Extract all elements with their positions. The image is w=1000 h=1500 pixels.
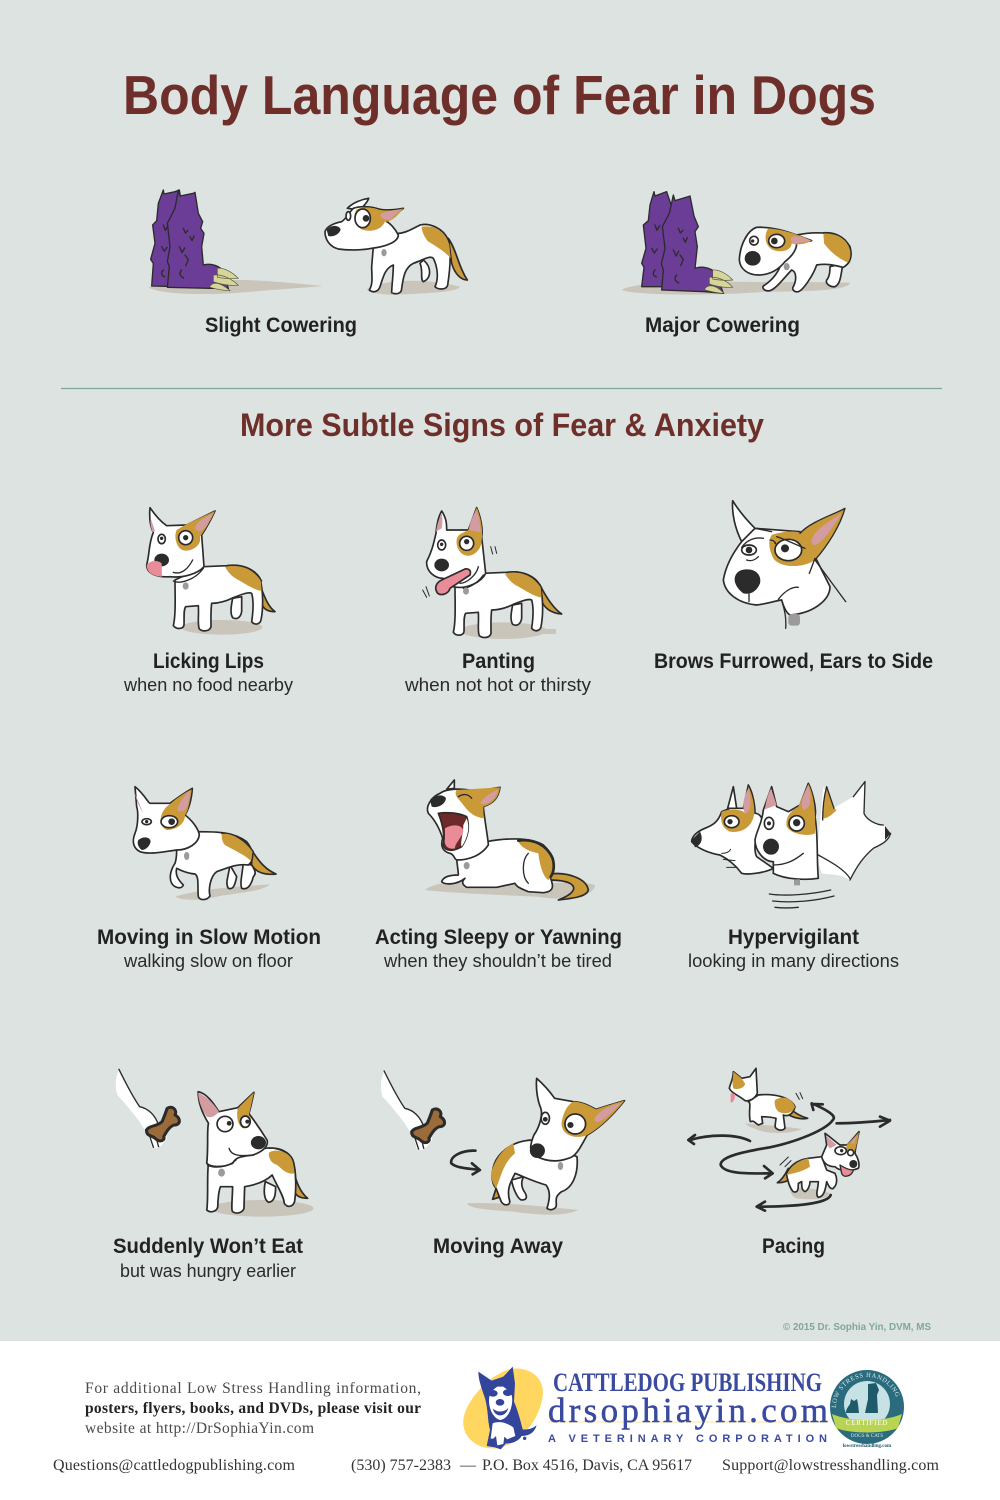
illustration: two pacing dogs with arrows xyxy=(688,1068,890,1211)
logo: Cattledog Publishing: drsophiayin.com xyxy=(548,1391,828,1430)
illustration: dog looking in many directions xyxy=(692,782,891,908)
logo: Cattledog Publishing: A VETERINARY CORPORATION xyxy=(548,1433,827,1445)
contact line: P.O. Box 4516, Davis, CA 95617 xyxy=(482,1457,692,1474)
text block: more information: posters, flyers, books, and DVDs, please visit our xyxy=(85,1400,421,1417)
badge: low stress handling certified: DOGS & CATS xyxy=(851,1434,883,1439)
panel: brows furrowed xyxy=(654,501,933,673)
label: Acting Sleepy or Yawning xyxy=(375,926,622,949)
sublabel: but was hungry earlier xyxy=(120,1261,296,1281)
sublabel: looking in many directions xyxy=(688,951,899,971)
badge: low stress handling certified: CERTIFIED xyxy=(846,1419,888,1427)
panel: slow motion xyxy=(97,787,321,971)
sublabel: when they shouldn’t be tired xyxy=(383,951,612,971)
label: Hypervigilant xyxy=(728,926,859,949)
panel: won't eat xyxy=(113,1069,314,1281)
label: Pacing xyxy=(762,1235,825,1258)
icon: dog and cat silhouette xyxy=(846,1383,879,1413)
panel: hypervigilant xyxy=(688,782,899,971)
sublabel: walking slow on floor xyxy=(123,951,293,971)
label: Brows Furrowed, Ears to Side xyxy=(654,650,933,673)
icon: hand and bone xyxy=(381,1071,445,1150)
panel: licking lips xyxy=(123,508,293,695)
text block: more information: For additional Low Stress Handling information, xyxy=(85,1380,421,1397)
illustration: hand offering bone and dog moving away xyxy=(381,1071,625,1215)
panel: slight cowering xyxy=(148,190,467,337)
arrow xyxy=(451,1151,480,1174)
label: Moving in Slow Motion xyxy=(97,926,321,949)
label: Licking Lips xyxy=(153,650,264,673)
illustration: hand offering bone and dog refusing xyxy=(116,1069,314,1217)
label: Slight Cowering xyxy=(205,314,357,337)
logo: Cattledog Publishing: CATTLEDOG PUBLISHING xyxy=(553,1368,822,1397)
sublabel: when not hot or thirsty xyxy=(404,675,591,695)
contact line: Support@lowstresshandling.com xyxy=(722,1457,940,1474)
illustration: dog licking lips xyxy=(147,508,275,635)
badge: low stress handling certified: lowstresshandling.com xyxy=(843,1444,892,1449)
panel: panting xyxy=(404,508,591,695)
contact line: — xyxy=(459,1457,477,1474)
contact line: Questions@cattledogpublishing.com xyxy=(53,1457,296,1474)
panel: moving away xyxy=(381,1071,625,1258)
illustration: monster feet and strongly cowering dog xyxy=(622,192,852,295)
title: Body Language of Fear in Dogs xyxy=(123,64,876,126)
section heading: More Subtle Signs of Fear & Anxiety xyxy=(240,407,764,443)
badge: low stress handling certified: LOW STRESS HANDLING xyxy=(832,1372,900,1408)
text block: more information: website at http://DrSophiaYin.com xyxy=(85,1420,314,1437)
logo: Cattledog Publishing xyxy=(463,1367,828,1449)
text block: more information xyxy=(85,1380,421,1437)
panel: yawning xyxy=(375,780,622,971)
contact line xyxy=(53,1457,940,1474)
label: Panting xyxy=(462,650,535,673)
icon: bone xyxy=(146,1107,179,1141)
icon: hand xyxy=(116,1069,167,1148)
panel: footer xyxy=(0,1341,1000,1500)
label: Moving Away xyxy=(433,1235,563,1258)
panel: pacing xyxy=(688,1068,890,1258)
badge: low stress handling certified xyxy=(830,1370,904,1449)
illustration: dog head with furrowed brows xyxy=(723,501,846,628)
label: Major Cowering xyxy=(645,314,800,337)
illustration: dog walking slowly xyxy=(133,787,276,900)
illustration: monster feet and slightly cowering dog xyxy=(148,190,467,295)
illustration: panting dog xyxy=(423,508,562,639)
sublabel: when no food nearby xyxy=(123,675,293,695)
arrows xyxy=(688,1103,890,1211)
contact line: (530) 757-2383 xyxy=(351,1457,451,1474)
illustration: yawning dog lying down xyxy=(425,780,595,900)
copyright: © 2015 Dr. Sophia Yin, DVM, MS xyxy=(783,1322,931,1333)
label: Suddenly Won’t Eat xyxy=(113,1235,303,1258)
icon: blue dog on yellow blob xyxy=(463,1367,543,1449)
panel: major cowering xyxy=(622,192,852,337)
